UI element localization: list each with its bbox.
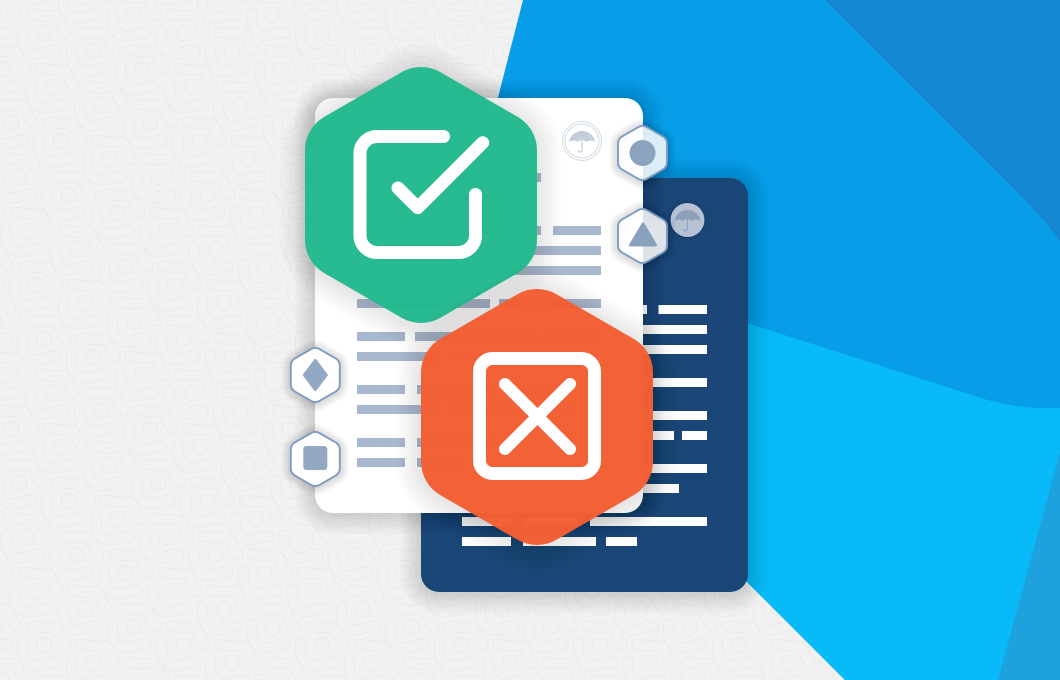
orange hexagon <box>421 289 653 545</box>
white document logo: umbrella badge <box>562 122 602 160</box>
green hexagon <box>305 67 537 323</box>
navy card shadow <box>421 179 748 593</box>
icon: small hexagon with square <box>291 432 340 487</box>
white card shadow <box>315 99 643 514</box>
muted blue corner shape <box>998 452 1060 680</box>
navy document logo: umbrella badge <box>669 202 706 238</box>
crossed box <box>480 358 594 474</box>
white card <box>315 98 643 513</box>
green hexagon shadow <box>305 69 537 325</box>
panel: white document <box>315 98 643 514</box>
check box and tick <box>360 136 483 252</box>
panel: navy document <box>421 178 748 593</box>
dark blue corner shape <box>825 0 1060 241</box>
navy card <box>421 178 748 592</box>
icon: small hexagon with circle <box>618 126 667 181</box>
icon: small hexagon with triangle <box>618 209 667 264</box>
icon: small hexagon with diamond <box>291 348 340 403</box>
background: blue angular shapes <box>450 0 1060 680</box>
icon: green hexagon with checked box <box>305 67 537 325</box>
main blue area <box>450 0 1060 680</box>
orange hexagon shadow <box>421 291 653 547</box>
white document text lines <box>357 173 601 467</box>
icon: orange hexagon with crossed box <box>421 289 653 547</box>
navy document text lines <box>462 305 707 546</box>
cyan area <box>700 308 1060 680</box>
